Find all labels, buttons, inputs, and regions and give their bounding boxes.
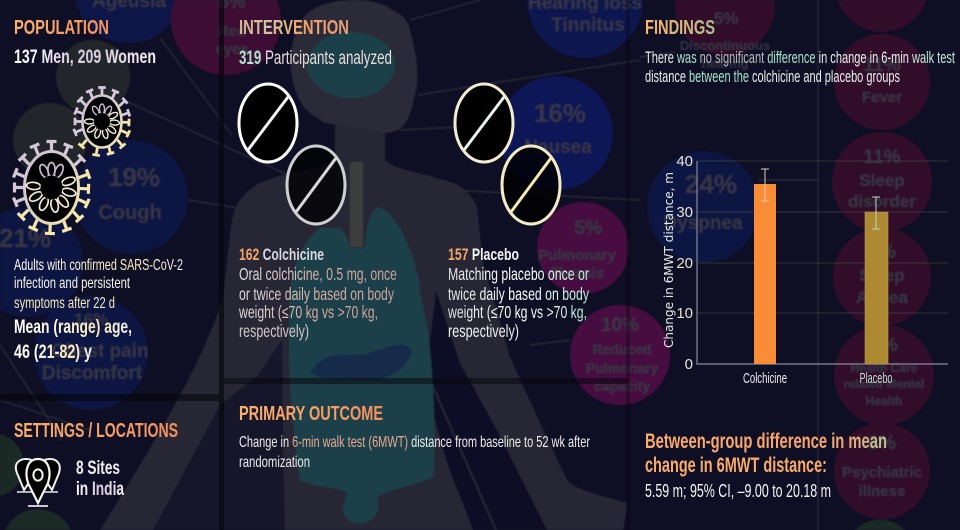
colchicine dosing text [238,264,397,341]
icon: map pins [16,459,60,506]
panel: population [13,17,183,363]
age: Mean (range) age, [14,317,132,338]
trachea [350,162,363,247]
background symptom circles: related Mental [844,377,924,391]
icon: colchicine pill 2 [287,146,345,224]
sites text [76,458,124,500]
x axis labels: Placebo [860,370,892,387]
left arm gap [153,340,285,530]
y axis tick labels: 40 [676,153,693,170]
between-group difference: change in 6MWT distance: [645,454,827,477]
background symptom circles: Red [218,23,246,40]
bar chart [661,153,948,387]
y axis tick labels: 30 [676,204,693,221]
outcome description: Change in 6-min walk test (6MWT) distance from baseline to 52 wk after [239,434,590,451]
placebo dosing text [447,264,589,341]
panel: findings [645,17,955,501]
background symptom circles: Dyspnea [663,213,743,234]
background symptom circles: 24% [685,169,737,199]
panel: primary outcome [239,403,590,471]
x axis labels [743,370,892,387]
icon: placebo pill 2 [502,146,560,224]
background symptom circles: Psychiatric [842,464,922,481]
background symptom circles: Discomfort [42,363,143,384]
dark abdomen band [310,345,412,380]
population description: infection and persistent [14,275,130,292]
heading: population: POPULATION [14,17,109,39]
heading: primary outcome: PRIMARY OUTCOME [239,403,383,425]
background symptom circles: 7% [870,335,898,356]
background symptom circles: Fever [862,89,902,106]
placebo arm label: 157 Placebo [448,245,519,264]
placebo dosing text: weight (≤70 kg vs >70 kg, [447,302,587,322]
background symptom circles: illness [859,483,905,500]
background symptom circles: Nausea [524,137,592,158]
bar: colchicine [754,184,776,364]
population description: symptoms after 22 d [14,295,115,312]
background symptom circles: 5% [574,218,602,239]
background symptom circles: capacity [594,378,650,394]
background symptom circles: 19% [108,162,160,192]
background symptom circles: Chest pain [51,341,149,362]
icon: placebo pill 1 [455,84,513,162]
heading: settings: SETTINGS / LOCATIONS [14,420,178,442]
error bar: colchicine [761,169,769,201]
y axis tick labels: 20 [676,255,693,272]
between-group difference: 5.59 m; 95% CI, –9.00 to 20.18 m [645,481,831,501]
background symptom circles: 11% [864,55,901,76]
colchicine arm label: 162 Colchicine [239,245,324,264]
background symptom circles: Discontinuous [680,38,770,53]
age [14,317,132,363]
background symptom circles: 10% [601,315,639,336]
body [100,125,627,530]
background symptom circles: fibrosis [550,265,604,282]
background symptom circles: hearing [702,56,749,71]
background symptom circles: Pulmonary [586,360,658,376]
sites text: 8 Sites [76,458,120,479]
background symptom circles: Health [866,394,902,408]
background symptom circles: Health Care [851,361,918,375]
x axis labels: Colchicine [743,370,787,387]
outcome description: randomization [239,454,310,471]
torso light line [430,380,496,530]
background symptom circles: 16% [74,310,108,329]
background symptom circles: 11% [864,147,901,168]
y axis tick labels: 10 [676,305,693,322]
population description: Adults with confirmed SARS-CoV-2 [14,257,183,274]
panel dividers [0,0,630,530]
icon: colchicine pill 1 [239,84,297,162]
background symptom circles: 21% [0,223,51,253]
background symptom circles: Reduced [592,341,652,357]
background symptom circles: 8% [868,433,896,454]
background symptom circles: Apnea [856,288,909,307]
background symptom circles: eyes [215,41,249,58]
panel: intervention [238,17,589,341]
background symptom circles: 8% [868,242,896,263]
colchicine dosing text: Oral colchicine, 0.5 mg, once [239,264,397,284]
colchicine dosing text: or twice daily based on body [239,284,394,304]
sites text: in India [76,479,124,500]
background symptom circles: 16% [534,98,586,128]
findings text [645,48,955,86]
background symptom circles: disorder [848,192,916,211]
error bar: placebo [872,197,880,229]
bar: placebo [865,212,888,364]
y axis tick labels: 0 [685,356,693,373]
outcome description [239,434,590,471]
grid lines [697,161,948,313]
y axis title: Change in 6MWT distance, m [661,172,676,348]
background symptom circles: Sleep [859,171,905,190]
colchicine dosing text: respectively) [239,321,309,341]
heading: findings: FINDINGS [645,17,715,39]
lungs and abdomen [289,207,434,523]
face teal [307,32,395,98]
hair and head [291,0,417,133]
icon: small virus [74,88,130,156]
right arm gap [427,290,547,530]
axes [697,161,948,364]
placebo dosing text: respectively) [448,321,519,341]
icon: large virus [13,142,90,234]
age: 46 (21-82) y [14,342,92,363]
background symptom circles: Pulmonary [538,247,616,264]
background symptom circles: 5% [714,9,738,28]
participants analyzed: 319 Participants analyzed [239,48,392,69]
heading: intervention: INTERVENTION [239,17,349,39]
placebo dosing text: Matching placebo once or [448,264,589,284]
y axis tick labels [676,153,693,373]
background symptom circles: Tinnitus [551,15,625,36]
population description [14,257,183,312]
background symptom circles: Sleep [859,266,905,285]
men and women counts: 137 Men, 209 Women [14,47,156,68]
placebo dosing text: twice daily based on body [448,284,589,304]
colchicine dosing text: weight (≤70 kg vs >70 kg, [238,302,378,322]
human body silhouette [100,0,627,530]
panel: settings and locations [14,420,178,506]
background symptom circles: Cough [98,202,162,224]
between-group difference [645,430,887,501]
